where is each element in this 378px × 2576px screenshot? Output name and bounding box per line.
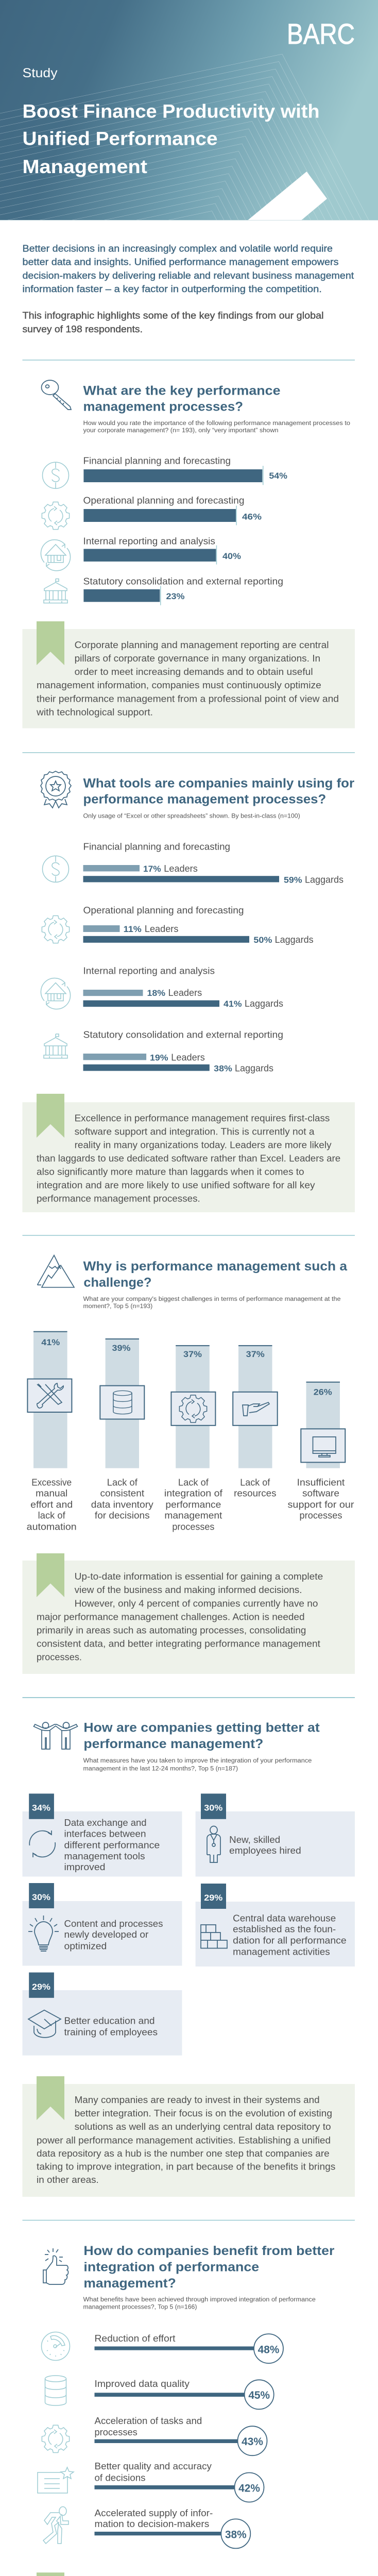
callout text: processes. [37,1652,82,1662]
callout text: integration and are more likely to use unified software for all key [37,1180,315,1191]
callout text [36,640,339,717]
card: education 29% [23,1972,182,2056]
row: statutory consolidation [44,1030,283,1073]
card text: interfaces between [64,1828,146,1839]
icon: bricks [201,1925,227,1948]
icon: light bulb [28,1916,59,1951]
icon: database [45,2376,66,2405]
row: statutory consolidation: 19% [150,1053,168,1062]
row: operational planning 46%: Operational planning and forecasting [83,496,244,506]
card text: improved [64,1862,105,1872]
row: statutory consolidation: Statutory consolidation and external reporting [83,1030,283,1040]
badge [201,1793,226,1819]
column: excessive manual effort: effort and [30,1500,73,1510]
icon: graduation cap [28,2010,61,2038]
row: financial planning: Leaders [164,863,198,874]
row: quality of decisions 42%: 42% [238,2482,260,2494]
row: quality of decisions 42%: of decisions [95,2472,145,2483]
question text [83,2297,316,2310]
ribbon [37,1553,64,1597]
row: internal reporting: Internal reporting and analysis [83,966,215,976]
column: integration: integration of [164,1488,223,1498]
card text: employees hired [229,1845,301,1856]
heading [83,2244,335,2291]
card text: different performance [64,1840,160,1850]
row: statutory consolidation: 38% [214,1063,232,1073]
callout text: view of the business and making informed decisions. [75,1585,302,1595]
card text: established as the foun- [233,1924,336,1934]
title: Boost Finance Productivity with [23,101,319,122]
column: data inventory: Lack of [107,1477,138,1487]
intro text: Better decisions in an increasingly complex and volatile world require [23,244,333,254]
icon: runner [43,2507,68,2544]
row: improved data quality 45%: Improved data quality [95,2379,190,2389]
BARC logo: BARC [287,18,355,50]
column: data inventory: 39% [112,1343,131,1353]
badge [29,1883,54,1908]
intro text: better data and insights. Unified performance management empowers [23,257,339,267]
row: acceleration 43%: Acceleration of tasks and [95,2416,202,2426]
row: financial planning: 59% [284,875,302,885]
badge: 30% [204,1803,222,1813]
callout text: However, only 4 percent of companies currently have no [75,1598,318,1608]
question text: What measures have you taken to improve the integration of your performance [83,1758,312,1764]
card text: dation for all performance [233,1936,347,1946]
row: financial planning 54%: Financial planning and forecasting [83,455,231,466]
callout text: order to meet increasing demands and to obtain useful [75,667,313,677]
heading [83,776,354,807]
card text: optimized [64,1941,107,1951]
icon: medal [41,771,71,808]
row: internal reporting [41,966,283,1009]
callout: up-to-date information [23,1553,355,1674]
row: reduction of effort 48% [95,2333,283,2363]
row: accelerated supply 38%: 38% [225,2529,247,2540]
icon: gear [42,502,70,530]
section: getting better [23,1721,355,2056]
callout text: Excellence in performance management requires first-class [75,1113,330,1124]
badge: 29% [204,1893,222,1903]
row: statutory consolidation 23%: 23% [166,591,184,601]
heading: Why is performance management such a [83,1259,348,1274]
header gradient background [0,0,378,221]
question text: What benefits have been achieved through improved integration of performance [83,2297,316,2303]
heading: performance management processes? [83,792,326,807]
question text: Only usage of “Excel or other spreadsheets” shown. By best-in-class (n=100) [83,813,300,819]
heading: What are the key performance [83,383,281,398]
heading [83,1259,348,1290]
card text: Central data warehouse [233,1913,336,1923]
heading: management processes? [83,400,243,414]
column: resources: Lack of [240,1477,270,1487]
bar chart: process importance [41,455,287,605]
callout text: reality in many organizations today. Leaders are more likely [75,1140,332,1150]
header chevron line pattern [0,54,369,220]
question text: moment?, Top 5 (n=193) [83,1303,152,1310]
icon: document with star [38,2467,74,2493]
callout: many companies [23,2076,355,2197]
heading: challenge? [83,1276,151,1290]
row: accelerated supply 38%: Accelerated supply of infor- [95,2508,213,2518]
row: quality of decisions 42% [95,2461,264,2502]
icon: mountains [37,1255,74,1287]
column: excessive manual effort: Excessive [31,1477,72,1487]
icon: gear [171,1392,215,1426]
question text: your corporate management? (n= 193), only “very important” shown [83,428,278,434]
callout text: also significantly more mature than laggards when it comes to [37,1167,304,1177]
row: reduction of effort 48%: 48% [258,2344,280,2355]
section: tools [41,771,354,1073]
column: resources [233,1345,278,1498]
card text: Content and processes [64,1919,163,1929]
title: Management [23,156,147,177]
column: data inventory: data inventory [91,1500,153,1510]
column: data inventory: for decisions [95,1510,150,1520]
icon: house [41,540,71,571]
lollipop chart: benefits [38,2332,283,2548]
heading: performance management? [83,1737,263,1751]
row: internal reporting: 18% [147,988,165,998]
icon: bank [44,579,67,603]
callout text: in other areas. [37,2175,99,2185]
icon: thumbs up [43,2248,68,2284]
row: operational planning [42,905,314,945]
grouped bar chart: leaders vs laggards [41,842,343,1073]
callout text [37,1113,340,1204]
column: software support [287,1382,354,1520]
column: software support: 26% [314,1387,332,1397]
icon: tools [27,1379,72,1412]
row: financial planning: 17% [143,864,161,874]
icon: database [100,1386,144,1419]
column: software support: support for our [287,1500,354,1510]
ribbon [37,2572,64,2576]
badge [29,1972,54,1998]
ribbon [37,1094,64,1138]
callout text: than laggards to use dedicated software rather than Excel. Leaders are [37,1154,340,1164]
intro text: This infographic highlights some of the key findings from our global [23,310,323,320]
column: excessive manual effort [27,1331,77,1532]
callout text: primarily in areas such as automating processes, consolidating [37,1625,306,1635]
card text [64,2015,158,2037]
column: resources: resources [234,1488,276,1498]
title [23,101,319,177]
callout text: solutions as well as an underlying central data repository to [75,2122,331,2132]
row: accelerated supply 38%: mation to decision-makers [95,2519,209,2529]
column: integration: 37% [183,1349,202,1359]
card text: training of employees [64,2027,158,2037]
question text [83,420,350,434]
question text: management processes?, Top 5 (n=166) [83,2304,197,2310]
column: data inventory: consistent [100,1488,144,1498]
row: operational planning: Leaders [145,924,178,934]
intro text [23,244,354,334]
row: acceleration 43% [95,2416,267,2455]
question text: How would you rate the importance of the following performance management processes to [83,420,350,427]
column: excessive manual effort: manual [36,1488,67,1498]
column: excessive manual effort: automation [27,1522,77,1532]
icon: employee [207,1826,220,1862]
card text: Data exchange and [64,1818,146,1828]
row: acceleration 43%: processes [95,2427,138,2437]
card text [64,1919,163,1951]
row: operational planning 46%: 46% [242,512,262,522]
callout: excellence [23,1094,355,1212]
card: content and processes 30% [23,1883,182,1966]
card: data warehouse 29% [196,1884,355,1967]
icon: monitor [301,1429,345,1462]
row: acceleration 43%: 43% [242,2436,263,2448]
row: quality of decisions 42%: Better quality and accuracy [95,2461,212,2471]
row: operational planning: Laggards [275,935,314,945]
row: internal reporting 40%: 40% [222,551,241,561]
callout text: pillars of corporate governance in many organizations. In [75,653,320,664]
card text: newly developed or [64,1929,148,1940]
column: integration: performance [165,1500,221,1510]
section: challenges [27,1255,354,1532]
ribbon [37,2076,64,2120]
callout text: data repository as a hub is the number one step that companies are [37,2148,330,2159]
card text [64,1818,160,1872]
card text: New, skilled [229,1835,280,1845]
row: operational planning: Operational planning and forecasting [83,905,244,916]
header banner [0,0,378,221]
callout text: performance management processes. [37,1194,200,1204]
column: excessive manual effort: lack of [38,1510,66,1520]
row: reduction of effort 48%: Reduction of effort [95,2333,175,2344]
white arrow shape [248,172,327,221]
callout text [37,1571,323,1662]
question text [83,1758,312,1772]
row: operational planning: 50% [253,935,272,945]
icon: key [41,380,71,410]
icon: gauge [41,2332,70,2361]
heading: How do companies benefit from better [83,2244,335,2258]
row: improved data quality 45% [95,2379,274,2409]
row: internal reporting: 41% [224,999,242,1009]
callout text: management information, companies must continuously optimize [37,680,321,690]
icon: gear [42,2425,70,2452]
row: internal reporting 40% [83,536,241,565]
badge [29,1793,54,1819]
column: integration: management [164,1510,222,1520]
question text: management in the last 12-24 months?, Top 5 (n=187) [83,1766,238,1772]
section: benefits [38,2244,335,2548]
heading: What tools are companies mainly using for [83,776,354,790]
intro text: decision-makers by delivering reliable and relevant business management [23,270,354,281]
column: software support: Insufficient [297,1477,345,1487]
row: statutory consolidation: Leaders [171,1052,205,1062]
intro text: information faster – a key factor in outperforming the competition. [23,284,322,294]
icon: hand [233,1392,278,1426]
icon: cycle [29,1831,55,1857]
row: operational planning 46% [83,496,262,525]
row: statutory consolidation: Laggards [235,1063,273,1073]
icon: people [34,1724,77,1749]
icon circles: heads [42,1722,69,1728]
column: resources: 37% [246,1349,265,1359]
card: data exchange 34% [23,1793,182,1876]
row: financial planning: Financial planning and forecasting [83,842,230,852]
badge [201,1884,226,1909]
row: financial planning [42,842,343,885]
intro text: survey of 198 respondents. [23,324,143,334]
question text: What are your company's biggest challenges in terms of performance management at the [83,1296,341,1302]
section: key processes [41,380,350,605]
row: accelerated supply 38% [95,2508,250,2548]
row: statutory consolidation 23% [83,577,283,605]
callout text: major performance management challenges. Action is needed [37,1612,305,1622]
column: integration: processes [172,1522,214,1532]
badge: 30% [32,1892,50,1902]
column: software support: software [302,1488,339,1498]
callout text: Up-to-date information is essential for gaining a complete [75,1571,323,1582]
callout text: software support and integration. This is currently not a [75,1127,315,1137]
callout text: taking to improve integration, in part because of the benefits it brings [37,2162,335,2172]
callout text: Many companies are ready to invest in their systems and [75,2095,320,2105]
callout text [37,2095,335,2185]
row: financial planning: Laggards [305,875,343,885]
card text: management tools [64,1851,145,1861]
column: software support: processes [300,1510,342,1520]
row: internal reporting: Leaders [168,988,202,998]
column: data inventory [91,1338,153,1520]
card: new employees 30% [196,1793,355,1876]
heading [83,383,281,414]
question text [83,1296,341,1310]
row: improved data quality 45%: 45% [248,2389,270,2401]
callout text: their performance management from a professional point of view and [37,693,339,704]
column: integration: Lack of [178,1477,209,1487]
row: financial planning 54%: 54% [269,471,287,481]
badge: 29% [32,1982,50,1992]
callout text: with technological support. [36,707,153,717]
heading: integration of performance [83,2260,259,2275]
card text: management activities [233,1946,330,1957]
card text [233,1913,347,1957]
callout text: Corporate planning and management reporting are central [75,640,329,650]
callout text: power all performance management activities. Establishing a unified [37,2135,331,2145]
column: excessive manual effort: 41% [41,1337,60,1347]
heading: How are companies getting better at [83,1721,320,1735]
heading [83,1721,320,1751]
callout text: consistent data, and better integrating performance management [37,1638,320,1649]
row: financial planning 54% [83,455,287,485]
card text [229,1835,301,1856]
row: internal reporting: Laggards [245,998,283,1009]
title: Unified Performance [23,128,217,149]
column: integration [164,1345,223,1532]
row: internal reporting 40%: Internal reporting and analysis [83,536,215,546]
study label: Study [23,66,58,80]
callout: improvements [23,2572,355,2576]
card text: Better education and [64,2015,154,2026]
icon: dollar [42,462,69,488]
badge: 34% [32,1803,50,1813]
row: statutory consolidation 23%: Statutory consolidation and external reporting [83,577,283,587]
heading: management? [83,2276,176,2291]
callout text: better integration. Their focus is on the evolution of existing [75,2108,332,2119]
ribbon [37,621,64,665]
callout: corporate planning [23,621,355,728]
row: operational planning: 11% [124,924,142,934]
